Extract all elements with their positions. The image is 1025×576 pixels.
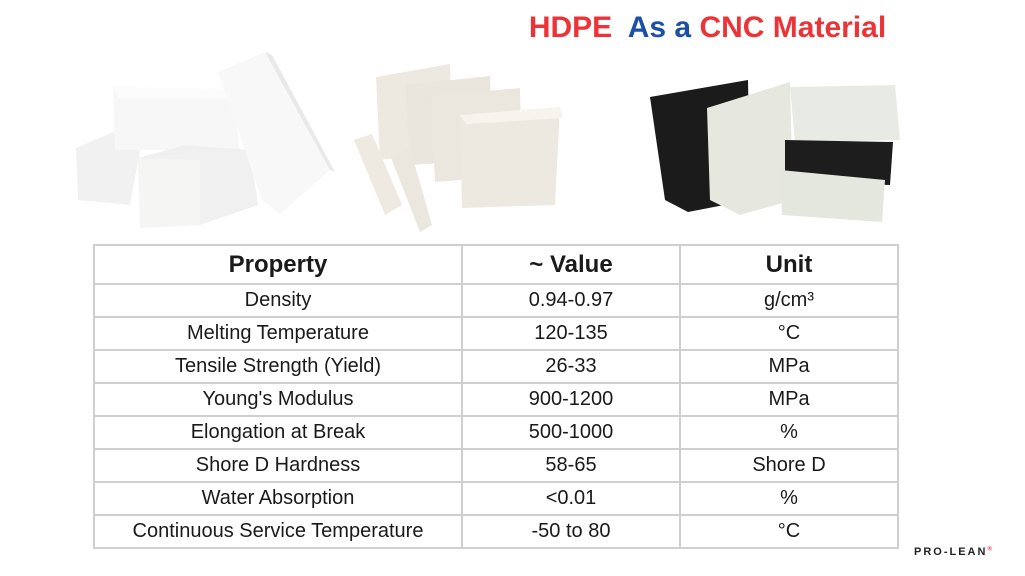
photo: black and white blocks [650,80,900,222]
table: properties: 120-135 [534,322,608,344]
table: properties: Young's Modulus [203,388,353,410]
table: properties: °C [778,520,800,542]
title: HDPE As a CNC Material [529,11,886,44]
table: properties: 0.94-0.97 [529,289,613,311]
table: properties: 26-33 [545,355,597,377]
table: properties: Density [245,289,311,311]
table: properties: % [780,421,798,443]
table: properties: Shore D Hardness [196,454,360,476]
table: properties: Tensile Strength (Yield) [175,355,381,377]
table: properties: Shore D [752,454,826,476]
table: properties: 58-65 [545,454,597,476]
table: properties: Water Absorption [202,487,354,509]
table: properties: MPa [768,388,810,410]
table: properties: Continuous Service Temperature [133,520,423,542]
table: properties: Unit [766,251,812,278]
table: properties: Elongation at Break [191,421,365,443]
table: properties: 500-1000 [529,421,613,443]
table: properties: ~ Value [529,251,613,278]
table: properties [93,244,899,549]
table: properties: -50 to 80 [532,520,610,542]
table: properties: <0.01 [546,487,596,509]
photo: HDPE plates [354,64,563,232]
table: properties: % [780,487,798,509]
table: properties: °C [778,322,800,344]
logo: PRO-LEAN® [914,546,994,558]
table: properties: g/cm³ [764,289,814,311]
photo: white HDPE blocks [76,52,335,228]
table: properties: Property [229,251,327,278]
table: properties: 900-1200 [529,388,613,410]
table: properties: MPa [768,355,810,377]
table: properties: Melting Temperature [187,322,369,344]
